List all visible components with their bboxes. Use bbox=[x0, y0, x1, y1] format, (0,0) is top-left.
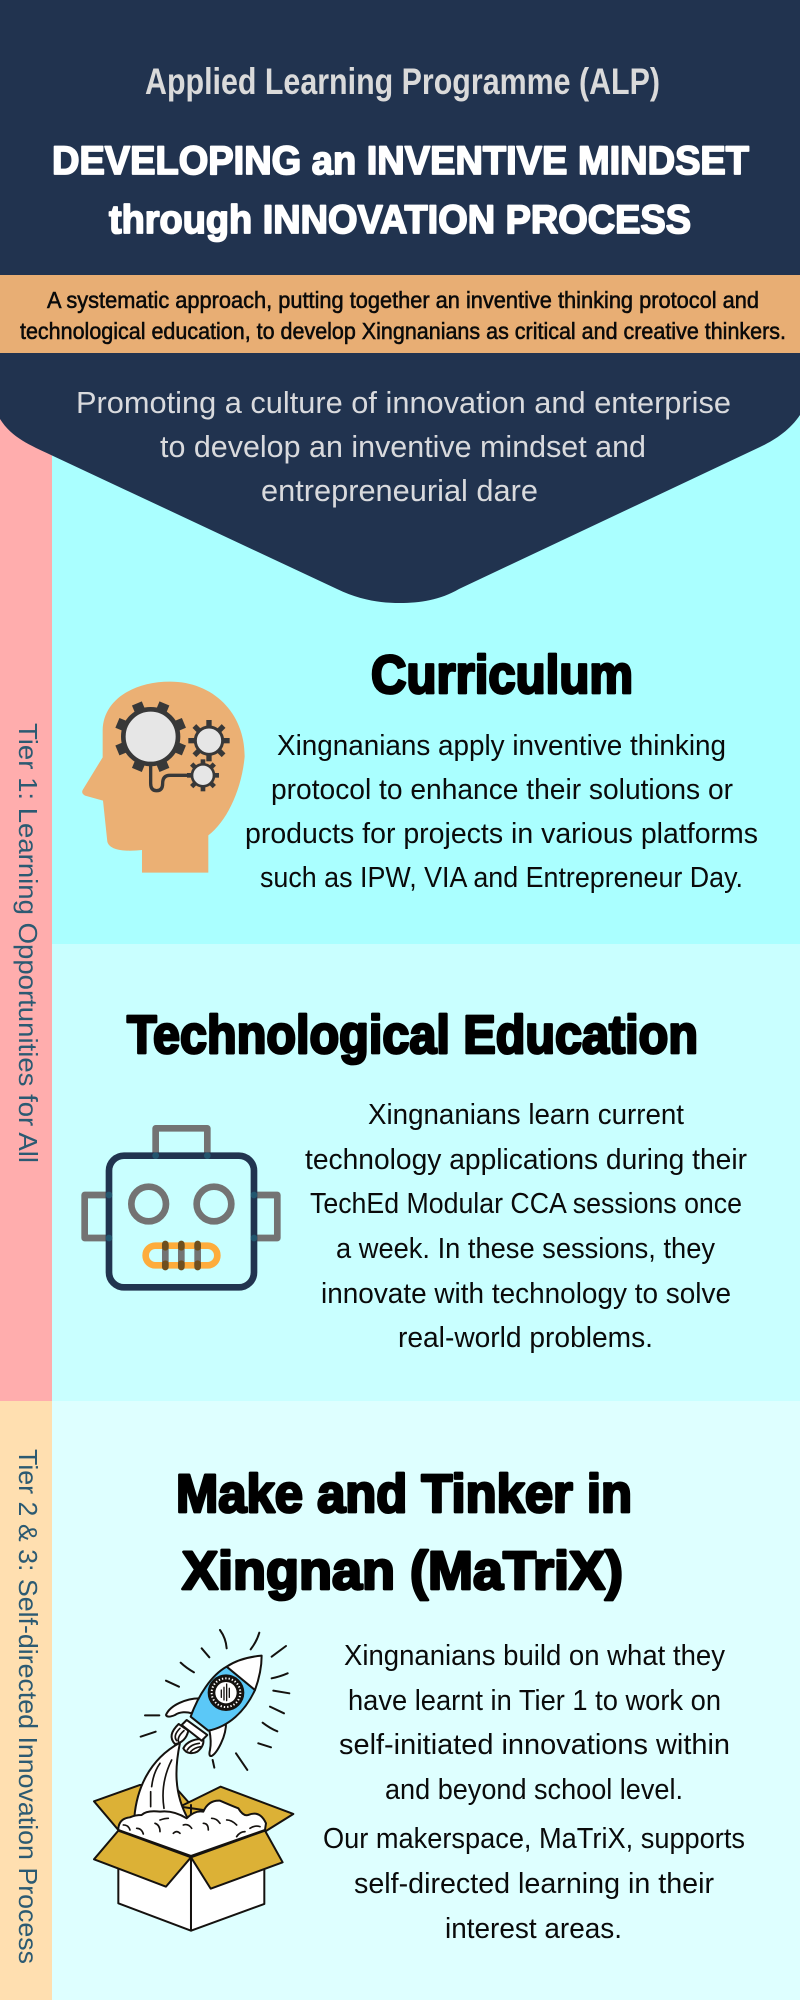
text block: technological education description: real-world problems. bbox=[398, 1322, 653, 1354]
text block: technological education description: a week. In these sessions, they bbox=[336, 1233, 715, 1265]
banner: A systematic approach, putting together an inventive thinking protocol and bbox=[47, 287, 759, 313]
text block: technological education description: Xingnanians learn current bbox=[368, 1099, 684, 1131]
icon: robot head bbox=[85, 1128, 277, 1287]
text block: make and tinker description bbox=[323, 1640, 745, 1945]
text block: curriculum description: protocol to enhance their solutions or bbox=[271, 774, 733, 806]
text block: mission statement: Promoting a culture of innovation and enterprise bbox=[76, 385, 731, 420]
text block: make and tinker description: interest areas. bbox=[445, 1913, 622, 1945]
panel: header bbox=[0, 0, 800, 603]
title bbox=[52, 139, 749, 242]
panel: make and tinker bbox=[52, 1401, 800, 2000]
text block: technological education description: technology applications during their bbox=[305, 1144, 747, 1176]
text block: technological education description: innovate with technology to solve bbox=[321, 1278, 731, 1310]
heading: Make and Tinker in Xingnan (MaTriX) bbox=[176, 1464, 632, 1601]
text block: make and tinker description: Our makerspace, MaTriX, supports bbox=[323, 1823, 745, 1855]
text block: curriculum description bbox=[245, 730, 758, 894]
text block: mission statement bbox=[76, 385, 731, 508]
panel: curriculum bbox=[52, 380, 800, 944]
label: Tier 1: Tier 1: Learning Opportunities for All bbox=[13, 723, 43, 1163]
banner bbox=[0, 275, 800, 353]
panel: tier 1 side strip bbox=[0, 380, 52, 1401]
text block: curriculum description: Xingnanians apply inventive thinking bbox=[277, 730, 726, 762]
text block: make and tinker description: and beyond school level. bbox=[385, 1774, 683, 1806]
heading: Technological Education: Technological Education bbox=[127, 1005, 698, 1065]
label: Tier 2 and 3: Tier 2 & 3: Self-directed Innovation Process bbox=[13, 1449, 43, 1964]
title: DEVELOPING an INVENTIVE MINDSET bbox=[52, 139, 749, 183]
subtitle: Applied Learning Programme (ALP) bbox=[145, 61, 660, 102]
title: through INNOVATION PROCESS bbox=[109, 198, 691, 242]
text block: make and tinker description: self-directed learning in their bbox=[354, 1868, 714, 1900]
panel: technological education bbox=[52, 944, 800, 1401]
panel: tier 2 and 3 side strip bbox=[0, 1401, 52, 2000]
text block: make and tinker description: Xingnanians build on what they bbox=[344, 1640, 725, 1672]
heading: Curriculum: Curriculum bbox=[371, 645, 633, 705]
heading: Make and Tinker in Xingnan (MaTriX): Make and Tinker in bbox=[176, 1464, 632, 1524]
text block: make and tinker description: have learnt in Tier 1 to work on bbox=[348, 1685, 721, 1717]
text block: mission statement: to develop an inventive mindset and bbox=[160, 429, 646, 464]
text block: curriculum description: such as IPW, VIA and Entrepreneur Day. bbox=[260, 862, 743, 894]
text block: technological education description bbox=[305, 1099, 747, 1354]
text block: mission statement: entrepreneurial dare bbox=[261, 473, 538, 508]
icon: head with gears bbox=[82, 682, 245, 873]
text block: make and tinker description: self-initiated innovations within bbox=[339, 1729, 730, 1761]
icon: rocket launching from a box bbox=[94, 1630, 293, 1931]
text block: technological education description: TechEd Modular CCA sessions once bbox=[310, 1188, 742, 1220]
heading: Make and Tinker in Xingnan (MaTriX): Xingnan (MaTriX) bbox=[182, 1541, 623, 1601]
text block: curriculum description: products for projects in various platforms bbox=[245, 818, 758, 850]
